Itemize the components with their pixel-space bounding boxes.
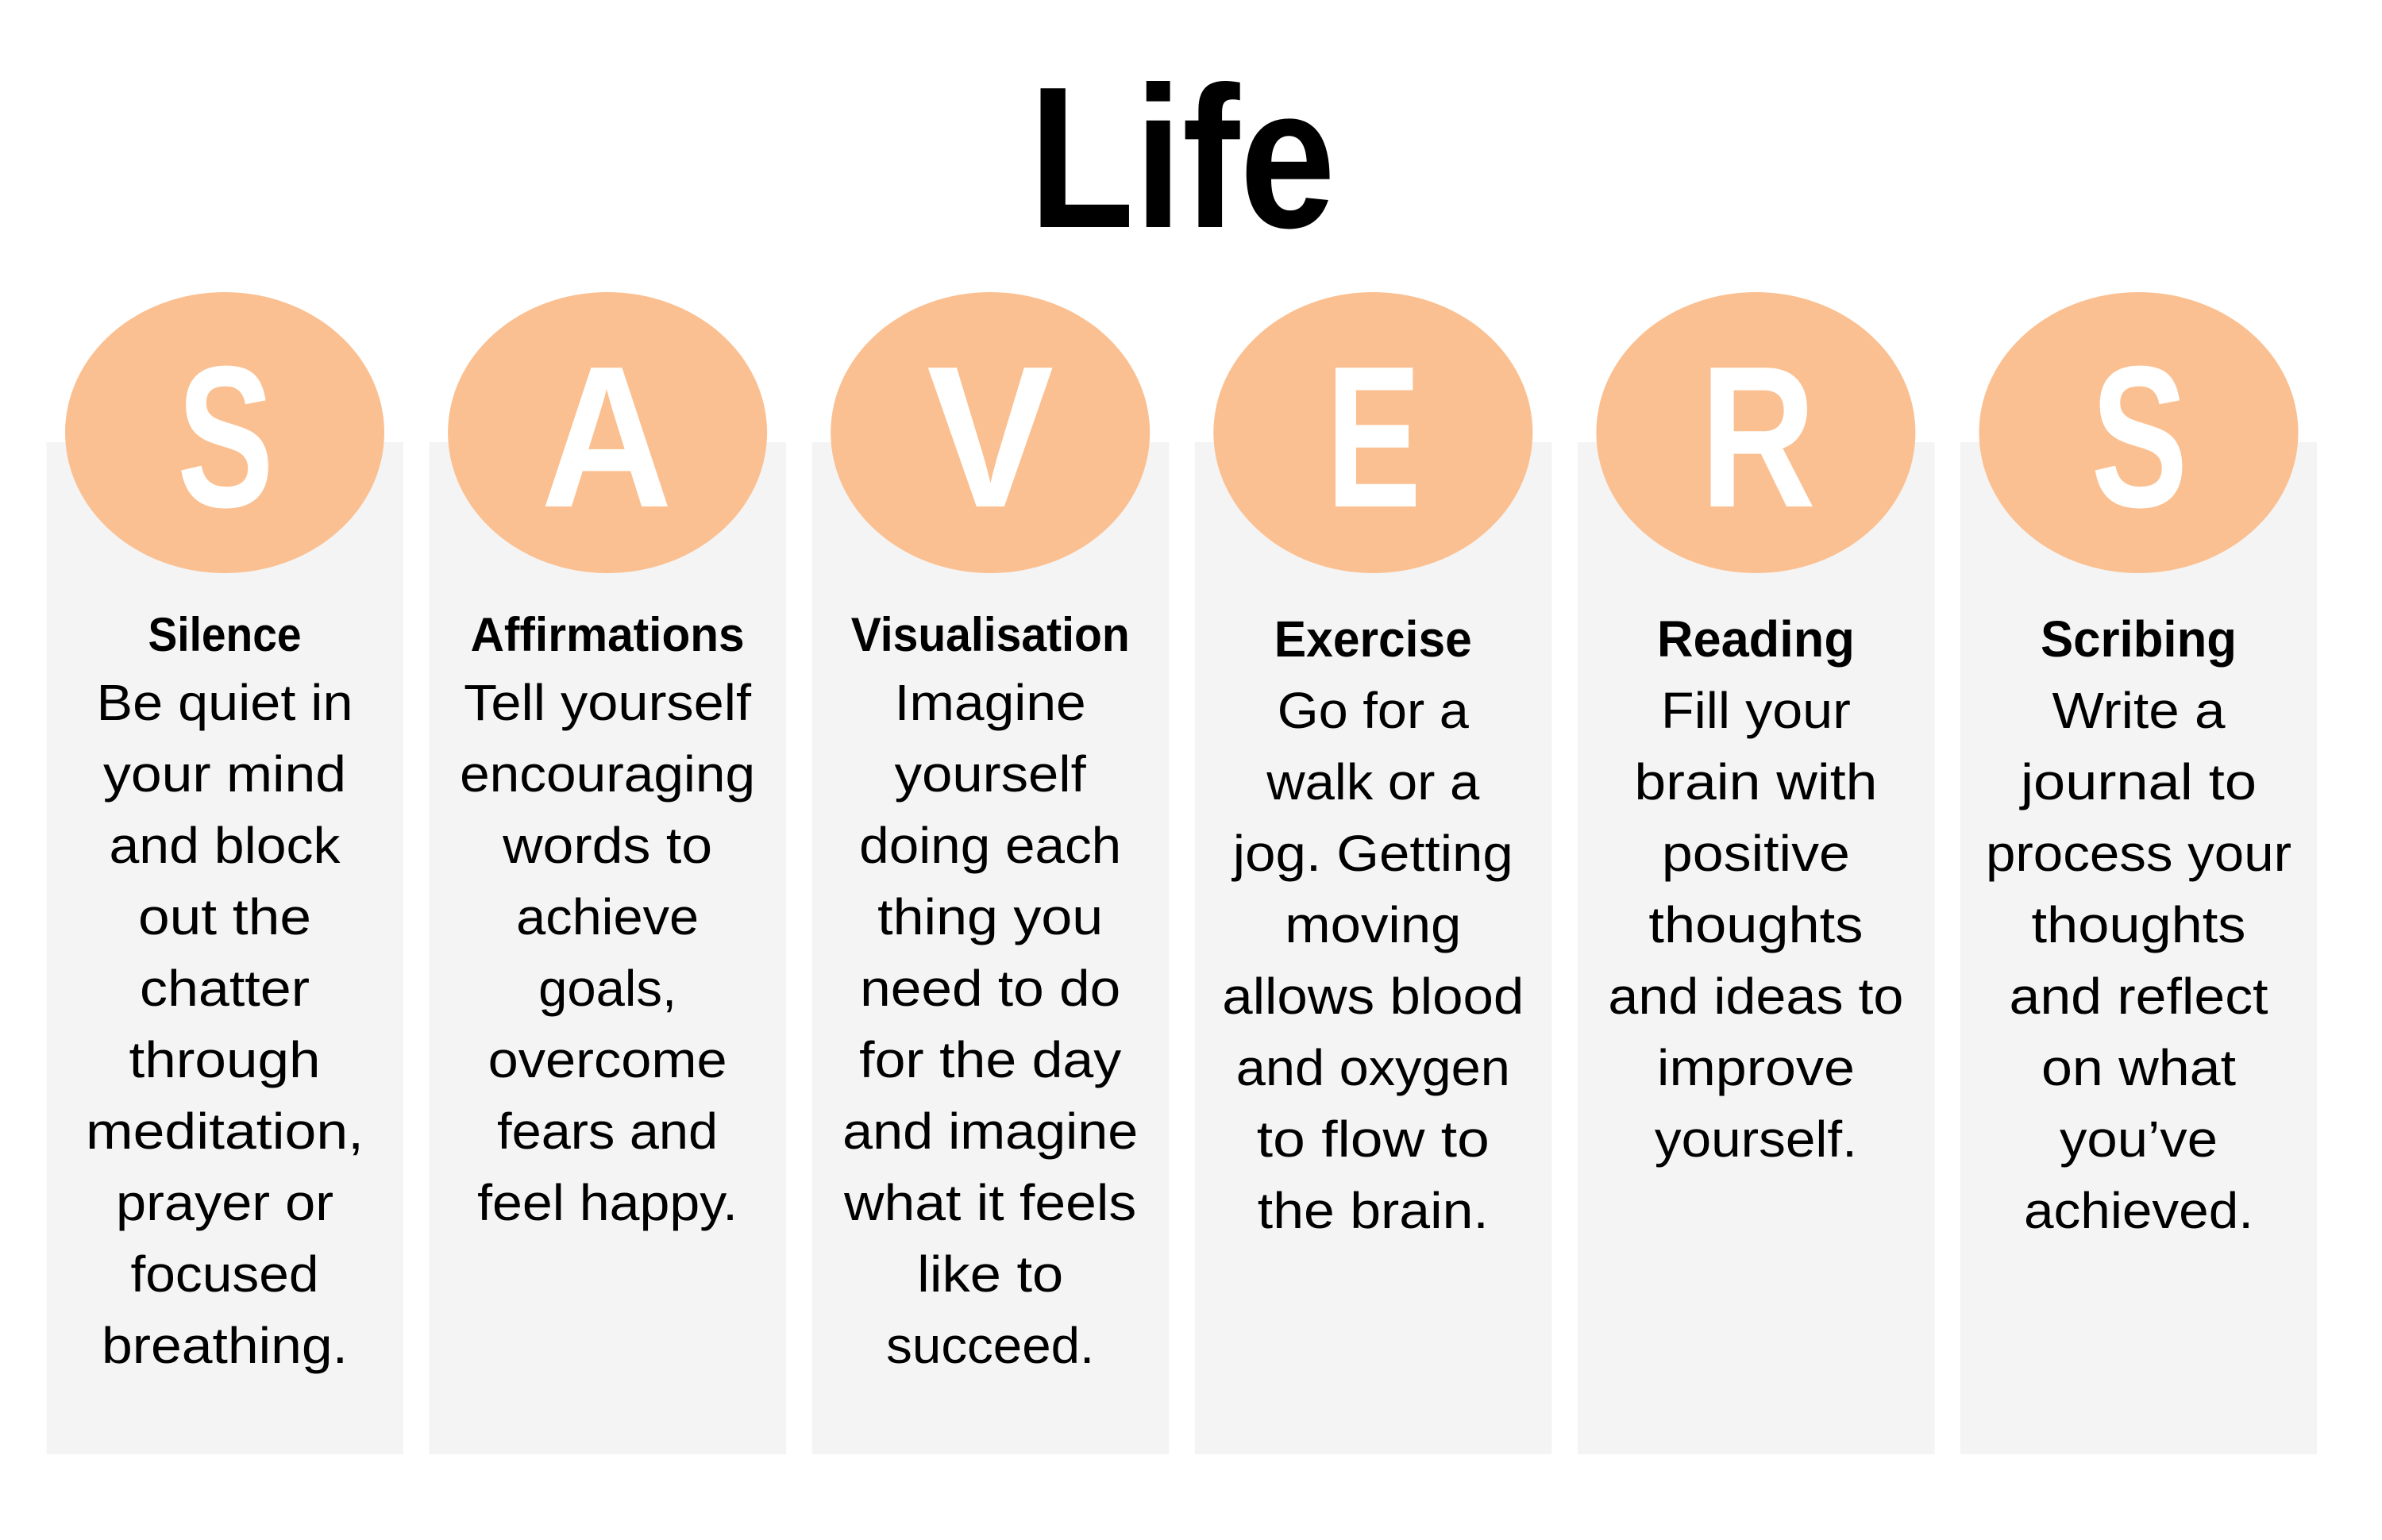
body text: Reading	[1608, 682, 1903, 1168]
body text: Reading: improve	[1657, 1039, 1855, 1096]
panel: Affirmations	[430, 292, 786, 1454]
body text: Silence: your mind	[103, 745, 346, 803]
body text: Exercise: allows blood	[1222, 968, 1524, 1025]
body text: Silence	[86, 674, 364, 1374]
heading: Visualisation: Visualisation	[851, 608, 1130, 661]
body text: Scribing	[1986, 682, 2291, 1239]
circle letter E: E	[1326, 324, 1421, 549]
body text: Silence: through	[129, 1031, 321, 1088]
body text: Visualisation: Imagine	[895, 674, 1086, 731]
circle letter S	[1979, 292, 2298, 573]
body text: Reading: thoughts	[1648, 896, 1863, 953]
circle letter V: V	[927, 324, 1054, 549]
body text: Scribing: journal to	[2019, 753, 2257, 810]
body text: Reading: brain with	[1634, 753, 1877, 810]
panel: Visualisation	[812, 292, 1169, 1454]
body text: Scribing: you’ve	[2060, 1111, 2218, 1168]
body text: Visualisation: for the day	[859, 1031, 1121, 1088]
circle letter R: R	[1700, 324, 1816, 549]
body text: Silence: meditation,	[86, 1103, 364, 1160]
body text: Silence: breathing.	[102, 1317, 348, 1374]
body text: Affirmations: encouraging	[460, 745, 755, 803]
body text: Scribing: achieved.	[2024, 1182, 2253, 1239]
circle letter R	[1596, 292, 1915, 573]
body text: Silence: chatter	[140, 960, 310, 1017]
body text: Scribing: on what	[2041, 1039, 2236, 1096]
circle letter A	[448, 292, 767, 573]
circle letter S: S	[177, 324, 274, 549]
heading: Silence: Silence	[148, 608, 302, 661]
body text: Visualisation: like to	[917, 1245, 1063, 1303]
body text: Affirmations: feel happy.	[477, 1174, 738, 1231]
body text: Visualisation: need to do	[860, 960, 1120, 1017]
heading: Exercise: Exercise	[1274, 610, 1472, 668]
body text: Exercise	[1222, 682, 1524, 1239]
body text: Exercise: jog. Getting	[1231, 825, 1513, 882]
title: Life	[1029, 44, 1336, 270]
body text: Reading: Fill your	[1661, 682, 1851, 739]
body text: Affirmations: overcome	[488, 1031, 727, 1088]
circle letter E	[1213, 292, 1532, 573]
heading: Affirmations: Affirmations	[471, 608, 745, 661]
body text: Affirmations	[460, 674, 755, 1231]
body text: Affirmations: fears and	[497, 1103, 718, 1160]
body text: Visualisation: thing you	[877, 888, 1103, 945]
body text: Affirmations: achieve	[516, 888, 699, 945]
body text: Scribing: process your	[1986, 825, 2291, 882]
body text: Silence: out the	[138, 888, 311, 945]
circle letter A: A	[541, 324, 673, 549]
body text: Visualisation: yourself	[895, 745, 1086, 803]
body text: Scribing: Write a	[2052, 682, 2226, 739]
circle letter S: S	[2091, 324, 2188, 549]
body text: Affirmations: words to	[502, 817, 712, 874]
body text: Scribing: and reflect	[2009, 968, 2268, 1025]
body text: Silence: prayer or	[116, 1174, 333, 1231]
body text: Affirmations: goals,	[538, 960, 676, 1017]
body text: Silence: and block	[110, 817, 341, 874]
body text: Silence: Be quiet in	[97, 674, 353, 731]
body text: Visualisation: doing each	[859, 817, 1121, 874]
heading: Reading: Reading	[1657, 610, 1855, 668]
body text: Exercise: to flow to	[1257, 1111, 1490, 1168]
body text: Visualisation: and imagine	[842, 1103, 1138, 1160]
body text: Visualisation: what it feels	[843, 1174, 1136, 1231]
body text: Reading: yourself.	[1655, 1111, 1857, 1168]
body text: Exercise: walk or a	[1266, 753, 1480, 810]
body text: Reading: and ideas to	[1608, 968, 1903, 1025]
body text: Reading: positive	[1662, 825, 1850, 882]
body text: Affirmations: Tell yourself	[464, 674, 751, 731]
body text: Exercise: the brain.	[1258, 1182, 1489, 1239]
body text: Silence: focused	[130, 1245, 319, 1303]
circle letter V	[831, 292, 1150, 573]
body text: Exercise: moving	[1285, 896, 1461, 953]
body text: Scribing: thoughts	[2031, 896, 2245, 953]
panel: Reading	[1578, 292, 1934, 1454]
panel: Scribing	[1960, 292, 2317, 1454]
body text: Visualisation: succeed.	[886, 1317, 1094, 1374]
heading: Scribing: Scribing	[2041, 610, 2237, 668]
panel: Silence	[46, 292, 403, 1454]
body text: Exercise: and oxygen	[1236, 1039, 1510, 1096]
circle letter S	[65, 292, 384, 573]
body text: Visualisation	[842, 674, 1138, 1374]
body text: Exercise: Go for a	[1278, 682, 1469, 739]
panel: Exercise	[1195, 292, 1551, 1454]
